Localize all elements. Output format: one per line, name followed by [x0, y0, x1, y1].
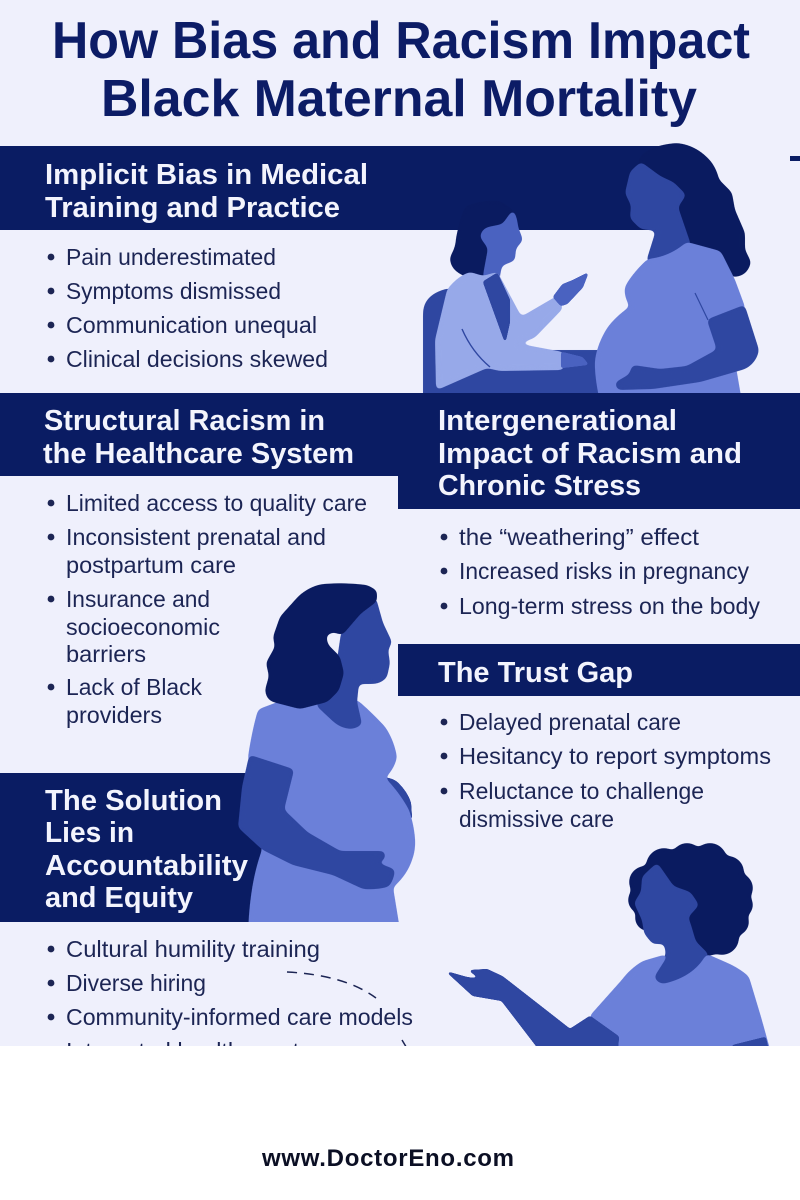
bullet list: structural racism: Limited access to quality care: [66, 490, 367, 516]
bullet list: trust gap: dismissive care: [459, 806, 614, 832]
banner text: solution: [45, 785, 248, 914]
banner: implicit bias: [0, 146, 800, 230]
icon: patient hair: [640, 144, 750, 276]
bullet list: structural racism: Insurance and: [66, 586, 210, 612]
icon: back hand: [383, 778, 411, 818]
icon: doctor raised hand: [554, 274, 587, 305]
banner text: solution: Lies in: [45, 817, 134, 849]
bullet list: solution: [48, 936, 413, 1064]
icon: doctor hair: [451, 202, 513, 276]
bullet list: implicit bias: [48, 244, 328, 372]
footer background: [0, 1046, 800, 1200]
banner: structural racism: the Healthcare System: [43, 438, 354, 470]
banner: structural racism: Structural Racism in: [44, 405, 325, 437]
icon: doctor chair and table: [424, 289, 606, 402]
icon: curly hair: [629, 844, 752, 955]
banner: implicit bias: Training and Practice: [45, 192, 340, 224]
icon: hair: [266, 584, 376, 708]
illustration: pregnant woman in profile: [239, 584, 414, 936]
banner: trust gap: [398, 644, 800, 696]
bullet list: structural racism: [48, 490, 367, 728]
icon: neck and face: [317, 598, 391, 728]
banner: structural racism: [0, 393, 400, 476]
icon: shirt: [590, 955, 772, 1060]
bullet list: trust gap: Hesitancy to report symptoms: [459, 743, 771, 769]
bullet list: intergenerational impact: [441, 524, 760, 619]
banner text: solution: and Equity: [45, 882, 193, 914]
bullet list: implicit bias: Clinical decisions skewed: [66, 346, 328, 372]
banner: implicit bias: Implicit Bias in Medical: [45, 159, 368, 191]
bullet list: structural racism: postpartum care: [66, 552, 236, 578]
banner: intergenerational impact: [398, 393, 800, 509]
icon: sleeve edge: [733, 1038, 770, 1060]
icon: doctor coat: [436, 273, 563, 389]
icon: doctor inner shirt: [484, 274, 509, 340]
bullet list: intergenerational impact: Long-term stress on the body: [459, 593, 760, 619]
icon: doctor sleeve crease: [462, 329, 490, 367]
banner: trust gap: The Trust Gap: [438, 657, 633, 689]
icon: face and neck: [635, 864, 708, 986]
banner background: solution: [0, 773, 262, 922]
icon: patient shirt: [596, 243, 744, 402]
illustration: doctor and pregnant patient: [424, 144, 758, 402]
bullet list: implicit bias: Symptoms dismissed: [66, 278, 281, 304]
title: [52, 12, 750, 128]
icon: patient face and neck: [626, 163, 690, 262]
icon: shirt: [249, 701, 414, 936]
bullet list: structural racism: barriers: [66, 641, 146, 667]
banner: intergenerational impact: Chronic Stress: [438, 470, 641, 502]
icon: arm and hand: [239, 756, 394, 888]
bullet list: structural racism: Inconsistent prenatal and: [66, 524, 326, 550]
bullet list: trust gap: Delayed prenatal care: [459, 709, 681, 735]
title: How Bias and Racism Impact: [52, 12, 750, 70]
icon: doctor lower hand: [562, 353, 587, 367]
bullet list: intergenerational impact: Increased risks in pregnancy: [459, 558, 749, 584]
bullet list: solution: Community-informed care models: [66, 1004, 413, 1030]
title: Black Maternal Mortality: [101, 70, 697, 128]
bullet list: solution: Diverse hiring: [66, 970, 206, 996]
banner: intergenerational impact: Intergenerational: [438, 405, 677, 437]
bullet list: structural racism: Lack of Black: [66, 674, 202, 700]
bullet list: trust gap: Reluctance to challenge: [459, 778, 704, 804]
bullet list: structural racism: providers: [66, 702, 162, 728]
bullet list: solution: Cultural humility training: [66, 936, 320, 962]
footer url: www.DoctorEno.com: [261, 1145, 514, 1172]
banner text: solution: The Solution: [45, 785, 222, 817]
bullet list: implicit bias: Communication unequal: [66, 312, 317, 338]
banner text: solution: Accountability: [45, 850, 248, 882]
banner: intergenerational impact: Impact of Racism and: [438, 438, 742, 470]
bullet list: solution: Integrated healthcare teams: [66, 1038, 356, 1064]
bullet list: intergenerational impact: the “weathering” effect: [459, 524, 700, 550]
illustration: woman gesturing: [449, 844, 772, 1060]
icon: patient arm: [616, 306, 758, 389]
icon: raised arm and hand: [449, 970, 618, 1060]
icon: doctor face: [481, 211, 522, 287]
bullet list: structural racism: socioeconomic: [66, 614, 220, 640]
bullet list: trust gap: [441, 709, 771, 832]
bullet list: implicit bias: Pain underestimated: [66, 244, 276, 270]
arrow: dashed curve: [287, 972, 408, 1050]
icon: patient sleeve crease: [695, 293, 708, 320]
